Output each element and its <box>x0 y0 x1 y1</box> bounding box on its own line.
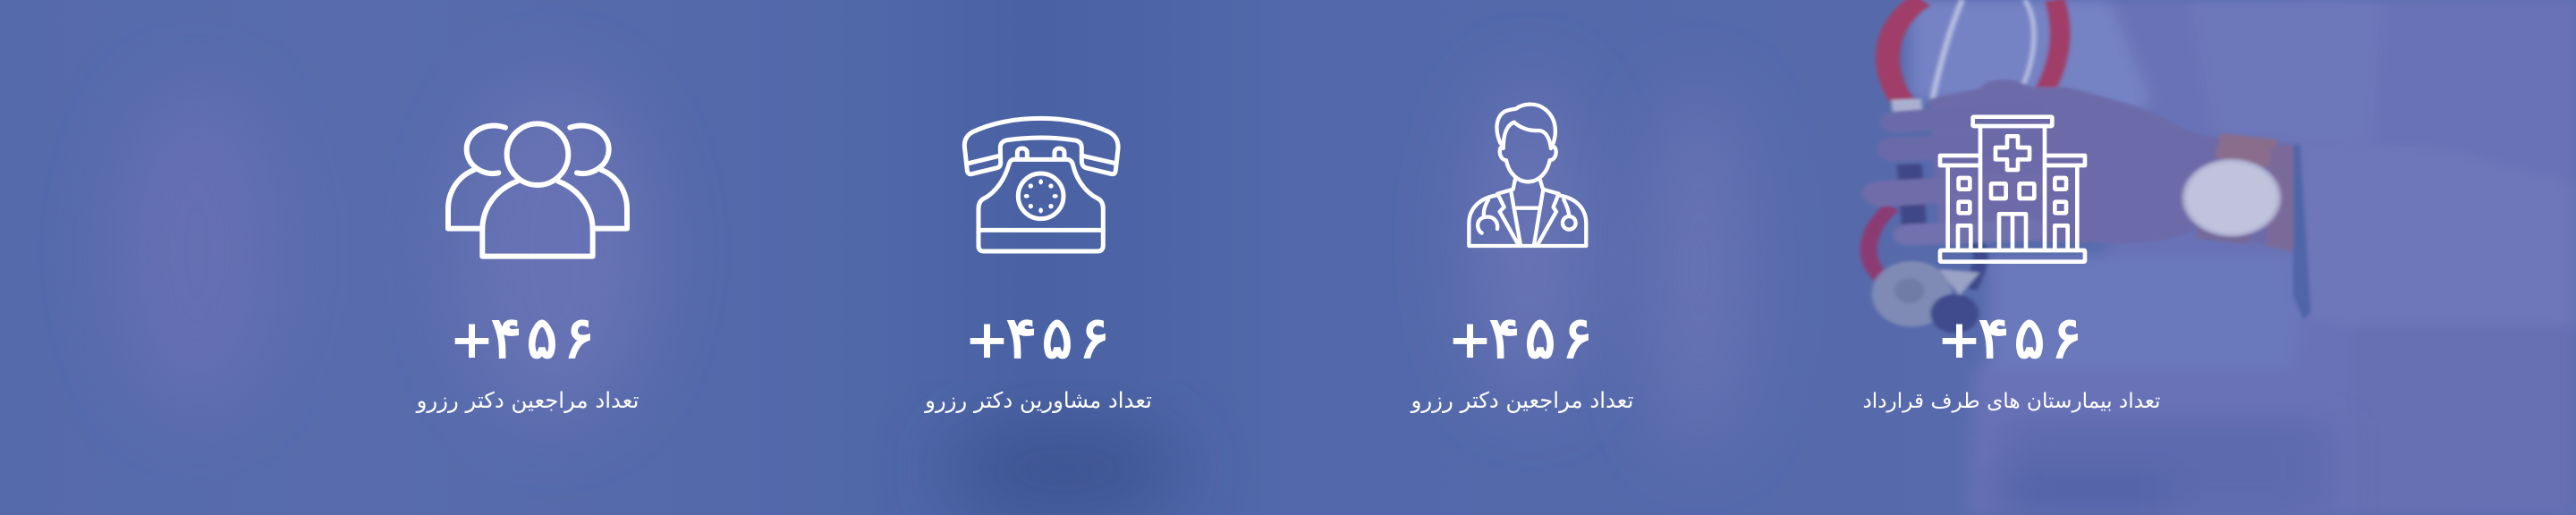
stat number: ۴ <box>1979 305 2009 372</box>
panel: doctor clients stat <box>1410 105 1633 413</box>
stat number: + <box>449 308 495 371</box>
icon: doctor <box>1469 105 1586 246</box>
icon: hospital <box>1940 117 2085 262</box>
panel: consultants stat <box>923 118 1152 413</box>
stat number: + <box>1447 308 1493 371</box>
label: تعداد مراجعین دکتر رزرو <box>1410 387 1633 413</box>
stat number: + <box>1936 308 1982 371</box>
label: تعداد مشاورین دکتر رزرو <box>923 387 1152 413</box>
icon: group of people <box>448 123 627 257</box>
panel: clients stat <box>415 123 639 413</box>
icon: telephone <box>964 118 1118 251</box>
stat number: ۶ <box>1562 305 1593 372</box>
stat number: ۵ <box>1042 305 1072 372</box>
stat number: ۵ <box>2014 305 2045 372</box>
stat number: ۴ <box>491 305 521 372</box>
stat number: + <box>964 308 1010 371</box>
stat number: ۶ <box>1079 305 1110 372</box>
stat number: ۴ <box>1489 305 1520 372</box>
stat number: ۶ <box>564 305 595 372</box>
stat number: ۶ <box>2051 305 2082 372</box>
label: تعداد بیمارستان های طرف قرارداد <box>1862 389 2161 413</box>
panel: contracted hospitals stat <box>1862 117 2161 413</box>
stat number: ۵ <box>527 305 557 372</box>
stat number: ۴ <box>1006 305 1037 372</box>
stat number: ۵ <box>1525 305 1555 372</box>
label: تعداد مراجعین دکتر رزرو <box>415 387 639 413</box>
